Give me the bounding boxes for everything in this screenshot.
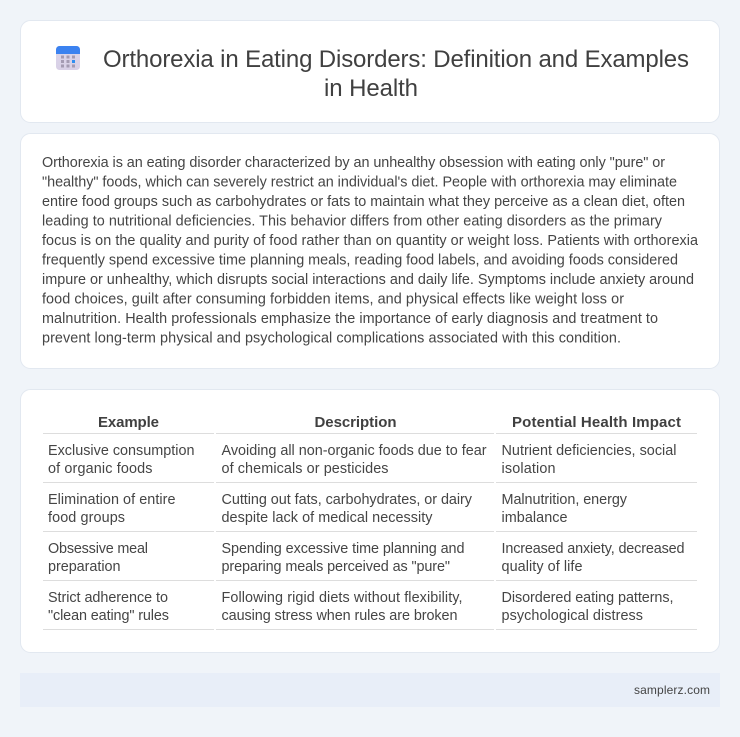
- table row: clean eating: Following rigid diets without flexibility,: [222, 590, 462, 606]
- table row: clean eating: Strict adherence to: [48, 590, 168, 606]
- table row: food groups: Cutting out fats, carbohydrates, or dairy: [222, 492, 473, 508]
- table row: meal preparation: preparing meals perceived as "pure": [222, 559, 450, 575]
- table row: organic foods: of chemicals or pesticides: [222, 461, 388, 477]
- text block: orthorexia description: prevent long-term physical and psychological complications associated with this condition.: [42, 330, 621, 346]
- panel: definition paragraph: [20, 134, 720, 368]
- table row: organic foods: [43, 443, 697, 482]
- table header row: [43, 414, 697, 434]
- text block: orthorexia description: Orthorexia is an eating disorder characterized by an unhealthy obsession with eating only "pure" or: [42, 155, 665, 171]
- table row: food groups: Elimination of entire: [48, 492, 176, 508]
- table row: meal preparation: [43, 541, 697, 580]
- table header row: Potential Health Impact: [512, 414, 681, 431]
- table row: meal preparation: Increased anxiety, decreased: [502, 541, 684, 557]
- panel: title header: [20, 20, 720, 122]
- panel: examples table: [20, 390, 720, 652]
- table row: organic foods: of organic foods: [48, 461, 152, 477]
- table header row: Example: [98, 414, 159, 431]
- table row: meal preparation: quality of life: [502, 559, 582, 575]
- table row: organic foods: isolation: [502, 461, 556, 477]
- text block: orthorexia description: food choices, guilt after consuming forbidden items, and physical effects like weight loss or: [42, 292, 624, 308]
- text block: orthorexia description: malnutrition. Health professionals emphasize the importance of early diagnosis and treatment to: [42, 311, 658, 327]
- text block: orthorexia description: frequently spend excessive time planning meals, reading food labels, and avoiding foods considered: [42, 252, 678, 268]
- text block: orthorexia description: entire food groups such as carbohydrates or fats to maintain what they perceive as a clean diet, often: [42, 194, 685, 210]
- footer band: [20, 673, 720, 707]
- icon: calendar grid: [56, 46, 80, 70]
- table row: clean eating: psychological distress: [502, 608, 643, 624]
- table row: clean eating: "clean eating" rules: [48, 608, 169, 624]
- table row: organic foods: Exclusive consumption: [48, 443, 194, 459]
- table row: food groups: [43, 492, 697, 532]
- text block: orthorexia description: leading to nutritional deficiencies. This behavior differs from other eating disorders as the primary: [42, 214, 663, 230]
- text block: orthorexia description: impure or unhealthy, which disrupts social interactions and daily life. Symptoms include anxiety around: [42, 272, 694, 288]
- table row: meal preparation: Obsessive meal: [48, 541, 148, 557]
- table header row: Description: [314, 414, 396, 431]
- table row: meal preparation: preparation: [48, 559, 120, 575]
- table row: food groups: despite lack of medical necessity: [222, 510, 433, 526]
- table row: food groups: imbalance: [502, 510, 568, 526]
- table row: meal preparation: Spending excessive time planning and: [222, 541, 464, 557]
- table row: clean eating: [43, 590, 697, 630]
- title: Orthorexia in Eating Disorders: Definition and Examples: [103, 46, 689, 73]
- table row: clean eating: causing stress when rules are broken: [222, 608, 458, 624]
- title: [103, 46, 689, 102]
- table row: organic foods: Nutrient deficiencies, social: [502, 443, 676, 459]
- text block: orthorexia description: "healthy" foods, which can severely restrict an individual's diet. People with orthorexia may eliminate: [42, 174, 677, 190]
- text block: orthorexia description: [42, 155, 698, 346]
- footer source text: samplerz.com: [634, 683, 710, 697]
- table row: food groups: Malnutrition, energy: [502, 492, 628, 508]
- table row: organic foods: Avoiding all non-organic foods due to fear: [222, 443, 487, 459]
- table row: food groups: food groups: [48, 510, 125, 526]
- table row: clean eating: Disordered eating patterns,: [502, 590, 674, 606]
- text block: orthorexia description: focus is on the quality and purity of food rather than on quantity or weight loss. Patients with orthorexia: [42, 233, 698, 249]
- title: in Health: [324, 75, 418, 102]
